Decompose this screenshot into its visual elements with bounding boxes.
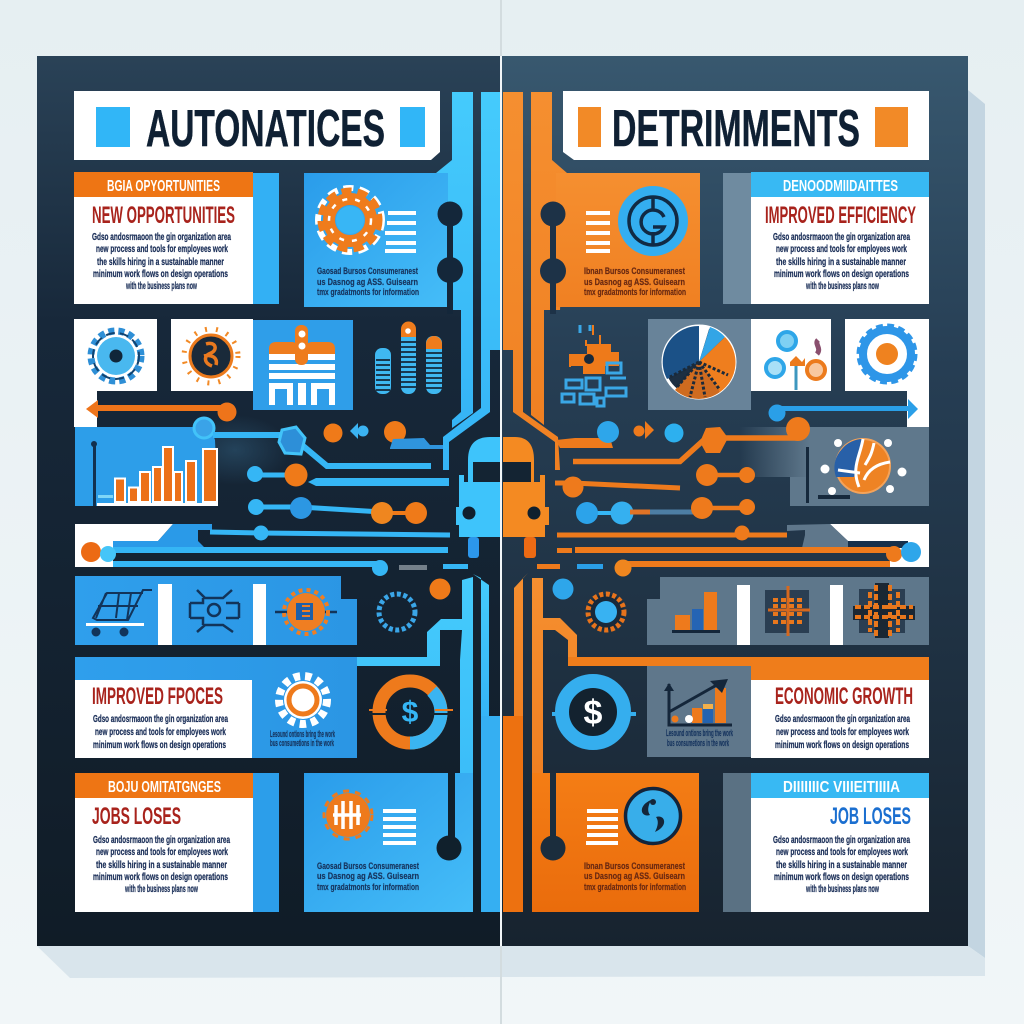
- panel text: Gaosad Bursos Consumeranest: [317, 266, 419, 277]
- truck right half: [503, 437, 549, 558]
- card body text: minimum work flows on design operations: [774, 268, 909, 280]
- body text: new process and tools for employees work: [95, 726, 226, 738]
- panel text: us Dasnog ag ASS. Guisearn: [317, 871, 419, 882]
- card body text: the skills hiring in a sustainable manner: [776, 859, 907, 871]
- panel text: tmx gradatmonts for information: [317, 882, 419, 893]
- left title marker: [96, 107, 130, 147]
- card body text: minimum work flows on design operations: [93, 871, 228, 883]
- icon: grid chip one: [765, 586, 810, 636]
- blue node: [597, 421, 619, 443]
- card body text: the skills hiring in a sustainable manner: [97, 256, 224, 268]
- card: jobs loses left: [75, 773, 279, 912]
- card body text: Gdso andosrmaoon the gin organization area: [773, 231, 910, 243]
- blue panel: badge lower: [304, 773, 473, 912]
- bar one: [375, 348, 391, 394]
- list lines icon: [383, 809, 416, 845]
- trace line: [308, 478, 449, 486]
- right circuit traces: [555, 417, 810, 524]
- card: job loses right: [723, 773, 929, 912]
- dash segments left: [399, 564, 468, 570]
- truck icon: [456, 437, 549, 558]
- gray panel: pie chart: [648, 319, 751, 410]
- card body text: Gdso andosrmaoon the gin organization area: [92, 231, 231, 243]
- icon: growth chart: [664, 679, 732, 725]
- icon: chip: [190, 590, 239, 632]
- icon: shopping cart: [86, 590, 152, 636]
- blue panel: improved focus: [75, 657, 357, 758]
- left stub dashes: [440, 478, 468, 569]
- card body text: Gdso andosrmaoon the gin organization area: [93, 834, 230, 846]
- card body text: new process and tools for employees work: [96, 243, 228, 255]
- panel text: Ibnan Bursos Consumeranest: [584, 861, 686, 872]
- gray panel and orange band: [568, 657, 929, 758]
- card body text: with the business plans now: [124, 883, 198, 895]
- orange node lower left: [430, 578, 450, 600]
- end node: [786, 417, 810, 441]
- body text: [93, 713, 228, 751]
- card body text: with the business plans now: [805, 280, 879, 292]
- icon: orange badge: [275, 590, 337, 634]
- card body text: new process and tools for employees work: [776, 243, 907, 255]
- right lower traces: [514, 573, 577, 773]
- bars icon: [375, 322, 442, 394]
- blue node lower right: [552, 578, 574, 600]
- left title banner: [74, 91, 440, 160]
- upper trace: [573, 438, 798, 462]
- upper line: [210, 532, 450, 535]
- strip start node: [614, 560, 632, 576]
- gray panel: globe: [740, 427, 929, 506]
- card header text: BGIA OPYORTUNITIES: [107, 178, 220, 195]
- blue panel: gear: [304, 173, 448, 307]
- panel text: [584, 861, 686, 893]
- left title text: AUTONATICES: [146, 100, 385, 158]
- connector nodes top right: [540, 202, 566, 314]
- arrow left: orange: [74, 391, 236, 427]
- icon: blue circle: [626, 788, 680, 844]
- white text block: [751, 680, 929, 758]
- arrow right: blue: [768, 391, 929, 427]
- strip node blue: [100, 546, 116, 562]
- orange connector: [556, 438, 613, 448]
- card header: [74, 172, 253, 197]
- right title marker right: [875, 107, 908, 147]
- blue node right: [664, 424, 684, 442]
- connector node: [540, 773, 566, 860]
- list lines icon: [385, 211, 416, 253]
- right title marker: [578, 107, 601, 147]
- panel text: us Dasnog ag ASS. Guisearn: [584, 871, 685, 882]
- card body text: [773, 834, 910, 895]
- right trunk traces: [503, 92, 567, 470]
- dots: [820, 439, 906, 495]
- icon: orange and blue chip: [562, 325, 626, 406]
- body text: Gdso andosrmaoon the gin organization area: [775, 713, 910, 725]
- card: improved efficiency: [723, 172, 929, 304]
- panel text: tmx gradatmonts for information: [584, 287, 686, 298]
- panel text: [666, 728, 733, 749]
- center orange column lower: [503, 716, 523, 912]
- icon: orange badge: [324, 791, 372, 839]
- end node: [372, 560, 388, 576]
- icon: blue gear lower: [379, 594, 415, 630]
- chart bars: [115, 447, 217, 502]
- gray panel and orange band: Lesound ontions bring the work: [666, 728, 733, 739]
- card body text: with the business plans now: [805, 883, 879, 895]
- card body text: new process and tools for employees work: [96, 846, 228, 858]
- connector node: [436, 773, 462, 860]
- left title marker right: [400, 107, 425, 147]
- truck window: [473, 462, 500, 482]
- node row two: [576, 497, 755, 524]
- panel text: [317, 266, 419, 298]
- strip node orange: [81, 542, 101, 562]
- blue icon strip: [75, 576, 357, 645]
- panel text: us Dasnog ag ASS. Guisearn: [584, 277, 685, 288]
- card body text: new process and tools for employees work: [776, 846, 908, 858]
- card header: [75, 773, 253, 798]
- icon: coin circle: [618, 186, 688, 256]
- node row one: [696, 464, 755, 486]
- bar two: [401, 322, 416, 394]
- truck lights: [462, 506, 476, 520]
- panel text: us Dasnog ag ASS. Guisearn: [317, 277, 418, 288]
- strip node: [734, 526, 750, 540]
- bar three: [426, 336, 442, 394]
- icon: orange ring gear: [588, 594, 624, 630]
- node row one: [247, 464, 308, 486]
- card header text: BOJU OMITATGNGES: [108, 779, 221, 796]
- heading: ECONOMIC GROWTH: [775, 683, 913, 710]
- card body text: with the business plans now: [126, 280, 197, 292]
- blue connector: [390, 438, 443, 449]
- right title banner: [563, 91, 929, 160]
- panel text: [584, 266, 686, 298]
- icon tile: flowers: [751, 319, 831, 391]
- ring node: [194, 418, 214, 438]
- card: new opportunities: [74, 172, 279, 304]
- icon: orange gear: [318, 188, 382, 252]
- icon: mini bars: [672, 592, 720, 633]
- panel text: [317, 861, 420, 893]
- card body text: [773, 231, 910, 292]
- right strip with traces: [557, 524, 929, 576]
- center blue column lower: [481, 716, 500, 912]
- list lines icon: [586, 809, 618, 845]
- strip end orange: [886, 546, 902, 562]
- hex node: [279, 427, 305, 454]
- body text: Gdso andosrmaoon the gin organization area: [93, 713, 228, 725]
- truck left half: [456, 437, 500, 558]
- donut: blue and orange dollar: [369, 681, 453, 743]
- card header: [751, 172, 929, 197]
- orange node right: [384, 421, 406, 443]
- gray icon strip: [647, 577, 929, 645]
- card body text: minimum work flows on design operations: [93, 268, 228, 280]
- card body text: the skills hiring in a sustainable manner: [96, 859, 227, 871]
- icon: grid chip two: [853, 583, 915, 638]
- middle node: [254, 526, 268, 540]
- orange node: [324, 424, 342, 442]
- node row two: [248, 497, 427, 524]
- card body text: [93, 834, 230, 895]
- orange panel: badge lower: [532, 773, 699, 912]
- left strip with traces: [75, 524, 450, 576]
- panel text: Ibnan Bursos Consumeranest: [584, 266, 686, 277]
- gray panel and orange band: bus consumetions in the work: [667, 738, 729, 749]
- dash segments right: [537, 564, 603, 569]
- body text: minimum work flows on design operations: [93, 739, 226, 751]
- card heading: NEW OPPORTUNITIES: [92, 202, 235, 229]
- blue panel: improved focus: bus consumetions in the work: [270, 738, 334, 749]
- board: right half: [501, 56, 968, 946]
- blue panel: improved focus: Lesound ontions bring the work: [270, 729, 335, 740]
- body text: [775, 713, 910, 751]
- card body text: [92, 231, 231, 292]
- icon: globe: [834, 439, 890, 493]
- heading: IMPROVED FPOCES: [92, 683, 223, 710]
- blue panel: factory icon: [253, 320, 353, 410]
- bar chart panel: [75, 427, 218, 506]
- board: left half: [37, 56, 501, 946]
- right title text: DETRIMMENTS: [612, 100, 860, 158]
- donut: blue and orange dollar: $: [402, 696, 419, 729]
- icon: white orange sun: [279, 676, 327, 724]
- card body text: Gdso andosrmaoon the gin organization area: [773, 834, 910, 846]
- body text: minimum work flows on design operations: [775, 739, 909, 751]
- panel text: Gaosad Bursos Consumeranest: [317, 861, 420, 872]
- strip end blue: [901, 542, 921, 562]
- card header text: DIIIIIIIC VIIIEITIIIIA: [783, 779, 900, 796]
- card heading: JOB LOSES: [830, 803, 911, 830]
- hex node: [700, 427, 728, 453]
- donut: blue dollar: $: [584, 694, 603, 732]
- left lower traces: [357, 574, 489, 912]
- card header text: DENOODMIIDAITTES: [783, 178, 898, 195]
- left trunk traces: [304, 92, 500, 470]
- card header: [751, 773, 929, 798]
- white text block: [75, 680, 252, 758]
- small arrow: [350, 423, 368, 439]
- card heading: JOBS LOSES: [92, 803, 181, 830]
- panel text: tmx gradatmonts for information: [317, 287, 419, 298]
- small arrow: [634, 421, 654, 439]
- panel: orange detriment: [556, 173, 700, 307]
- body text: new process and tools for employees work: [776, 726, 909, 738]
- icon tile: blue gear: [74, 319, 157, 391]
- center divider line: [500, 0, 502, 1024]
- upper trace: [213, 435, 431, 466]
- connector nodes top left: [437, 202, 463, 314]
- card body text: minimum work flows on design operations: [774, 871, 909, 883]
- donut: blue dollar: [552, 681, 636, 743]
- trace line: [555, 476, 680, 498]
- icon tile: orange sun: [171, 319, 253, 391]
- left circuit traces: [194, 418, 449, 524]
- glow behind left circuit: [180, 415, 290, 485]
- list lines icon: [586, 211, 610, 253]
- icon tile: blue gear with orange core: [845, 319, 929, 391]
- panel text: [270, 729, 335, 749]
- card body text: the skills hiring in a sustainable manner: [776, 256, 906, 268]
- panel text: tmx gradatmonts for information: [584, 882, 686, 893]
